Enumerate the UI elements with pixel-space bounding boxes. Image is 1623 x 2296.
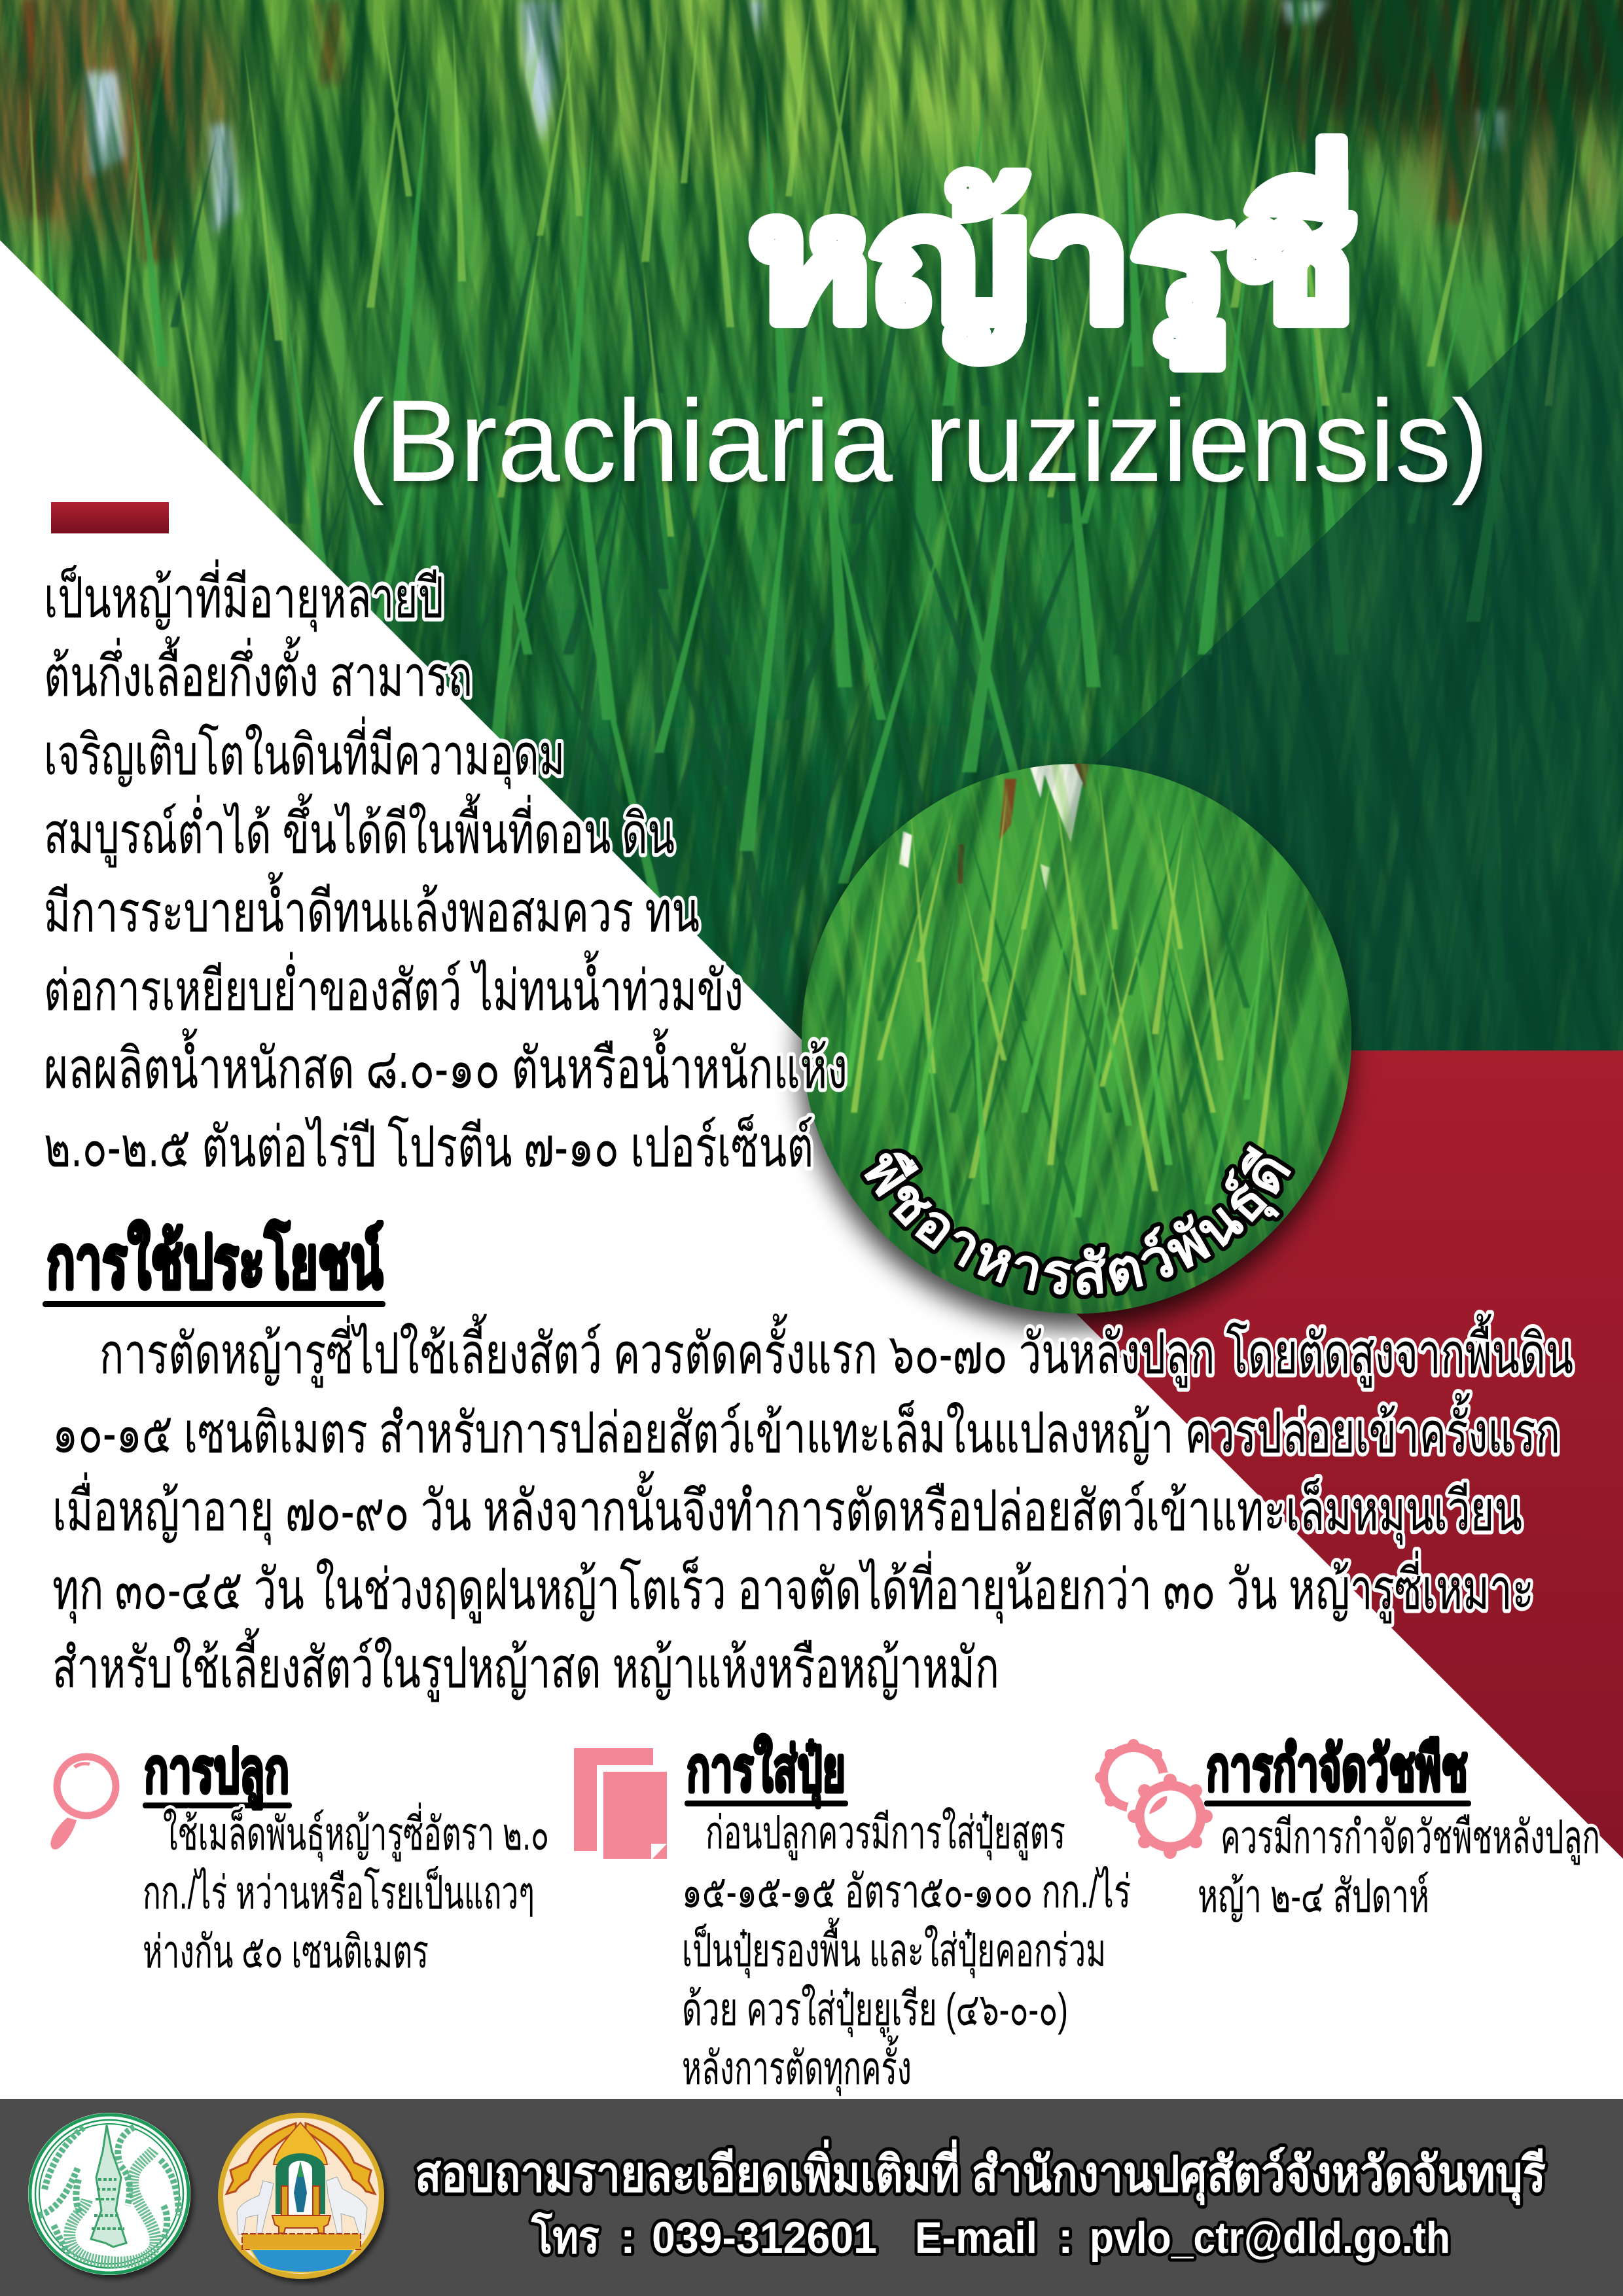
red accent bar [51, 502, 169, 533]
description paragraph: เจริญเติบโตในดินที่มีความอุดม [44, 716, 565, 789]
contact line 2: โทร [531, 2212, 599, 2263]
title: Thai name: หญ้ารูซี่ [749, 139, 1355, 367]
seal: Department of Livestock [218, 2113, 384, 2279]
column: weed control [1095, 1734, 1600, 1922]
contact line 2: E-mail [915, 2213, 1037, 2263]
fertilizing text: เป็นปุ๋ยรองพื้น และใส่ปุ๋ยคอกร่วม [682, 1917, 1106, 1979]
heading: fertilizing: การใส่ปุ๋ย [687, 1734, 846, 1808]
icon: gears [1095, 1739, 1214, 1860]
contact line 2: pvlo_ctr@dld.go.th [1090, 2213, 1450, 2263]
description paragraph [44, 559, 847, 1179]
tree line at the top [0, 0, 1623, 262]
heading: weed control [1204, 1734, 1471, 1806]
description paragraph: เป็นหญ้าที่มีอายุหลายปี [44, 559, 444, 632]
grass blades [29, 0, 1578, 1047]
contact line 2: : [620, 2213, 635, 2263]
weed control text [1198, 1812, 1600, 1922]
fertilizing text: ก่อนปลูกควรมีการใส่ปุ๋ยสูตร [705, 1806, 1065, 1861]
heading: benefits [43, 1220, 385, 1307]
heading: benefits: การใช้ประโยชน์ [46, 1220, 383, 1303]
description paragraph: ต้นกึ่งเลื้อยกึ่งตั้ง สามารถ [44, 636, 473, 708]
title: scientific name: (Brachiaria ruziziensis) [347, 376, 1489, 506]
red triangle panel [812, 1050, 1623, 1859]
benefits paragraph [52, 1314, 1573, 1702]
curved caption: พืชอาหารสัตว์พันธุ์ดี [860, 1141, 1296, 1300]
benefits paragraph: สำหรับใช้เลี้ยงสัตว์ในรูปหญ้าสด หญ้าแห้งหรือหญ้าหมัก [52, 1628, 999, 1702]
planting text [143, 1803, 549, 1977]
footer bar [0, 2099, 1623, 2296]
description paragraph: ๒.๐-๒.๕ ตันต่อไร่ปี โปรตีน ๗-๑๐ เปอร์เซ็นต์ [44, 1114, 813, 1179]
dark green triangle overlay [809, 236, 1623, 1051]
heading: planting: การปลูก [144, 1736, 289, 1810]
planting text: กก./ไร่ หว่านหรือโรยเป็นแถวๆ [143, 1866, 535, 1918]
description paragraph: สมบูรณ์ต่ำได้ ขึ้นได้ดีในพื้นที่ดอน ดิน [44, 793, 675, 868]
fertilizing text: หลังการตัดทุกครั้ง [682, 2035, 912, 2096]
heading: planting [143, 1736, 292, 1810]
icon: documents [574, 1748, 667, 1859]
photo: rice grass field background [0, 0, 1623, 1549]
heading: weed control: การกำจัดวัชพืช [1206, 1734, 1468, 1803]
weed control text: หญ้า ๒-๔ สัปดาห์ [1198, 1871, 1429, 1922]
contact line 2 [531, 2212, 1450, 2263]
heading: fertilizing [685, 1734, 848, 1808]
description paragraph: ผลผลิตน้ำหนักสด ๘.๐-๑๐ ตันหรือน้ำหนักแห้ง [44, 1028, 847, 1100]
description paragraph: มีการระบายน้ำดีทนแล้งพอสมควร ทน [44, 872, 700, 944]
contact line 2: 039-312601 [652, 2213, 877, 2263]
fertilizing text: ด้วย ควรใส่ปุ๋ยยูเรีย (๔๖-๐-๐) [682, 1983, 1068, 2037]
contact line 2: : [1058, 2213, 1073, 2263]
photo circle with curved caption [779, 762, 1366, 1348]
seal: Ministry of Agriculture [28, 2113, 190, 2275]
planting text: ห่างกัน ๕๐ เซนติเมตร [143, 1926, 429, 1977]
column: fertilizing [574, 1734, 1131, 2096]
planting text: ใช้เมล็ดพันธุ์หญ้ารูซี่อัตรา ๒.๐ [163, 1803, 549, 1862]
fertilizing text: ๑๕-๑๕-๑๕ อัตรา๕๐-๑๐๐ กก./ไร่ [682, 1866, 1131, 1917]
icon: magnifier [50, 1757, 116, 1850]
column: planting [50, 1736, 549, 1977]
description paragraph: ต่อการเหยียบย่ำของสัตว์ ไม่ทนน้ำท่วมขัง [44, 950, 743, 1022]
fertilizing text [682, 1806, 1131, 2096]
